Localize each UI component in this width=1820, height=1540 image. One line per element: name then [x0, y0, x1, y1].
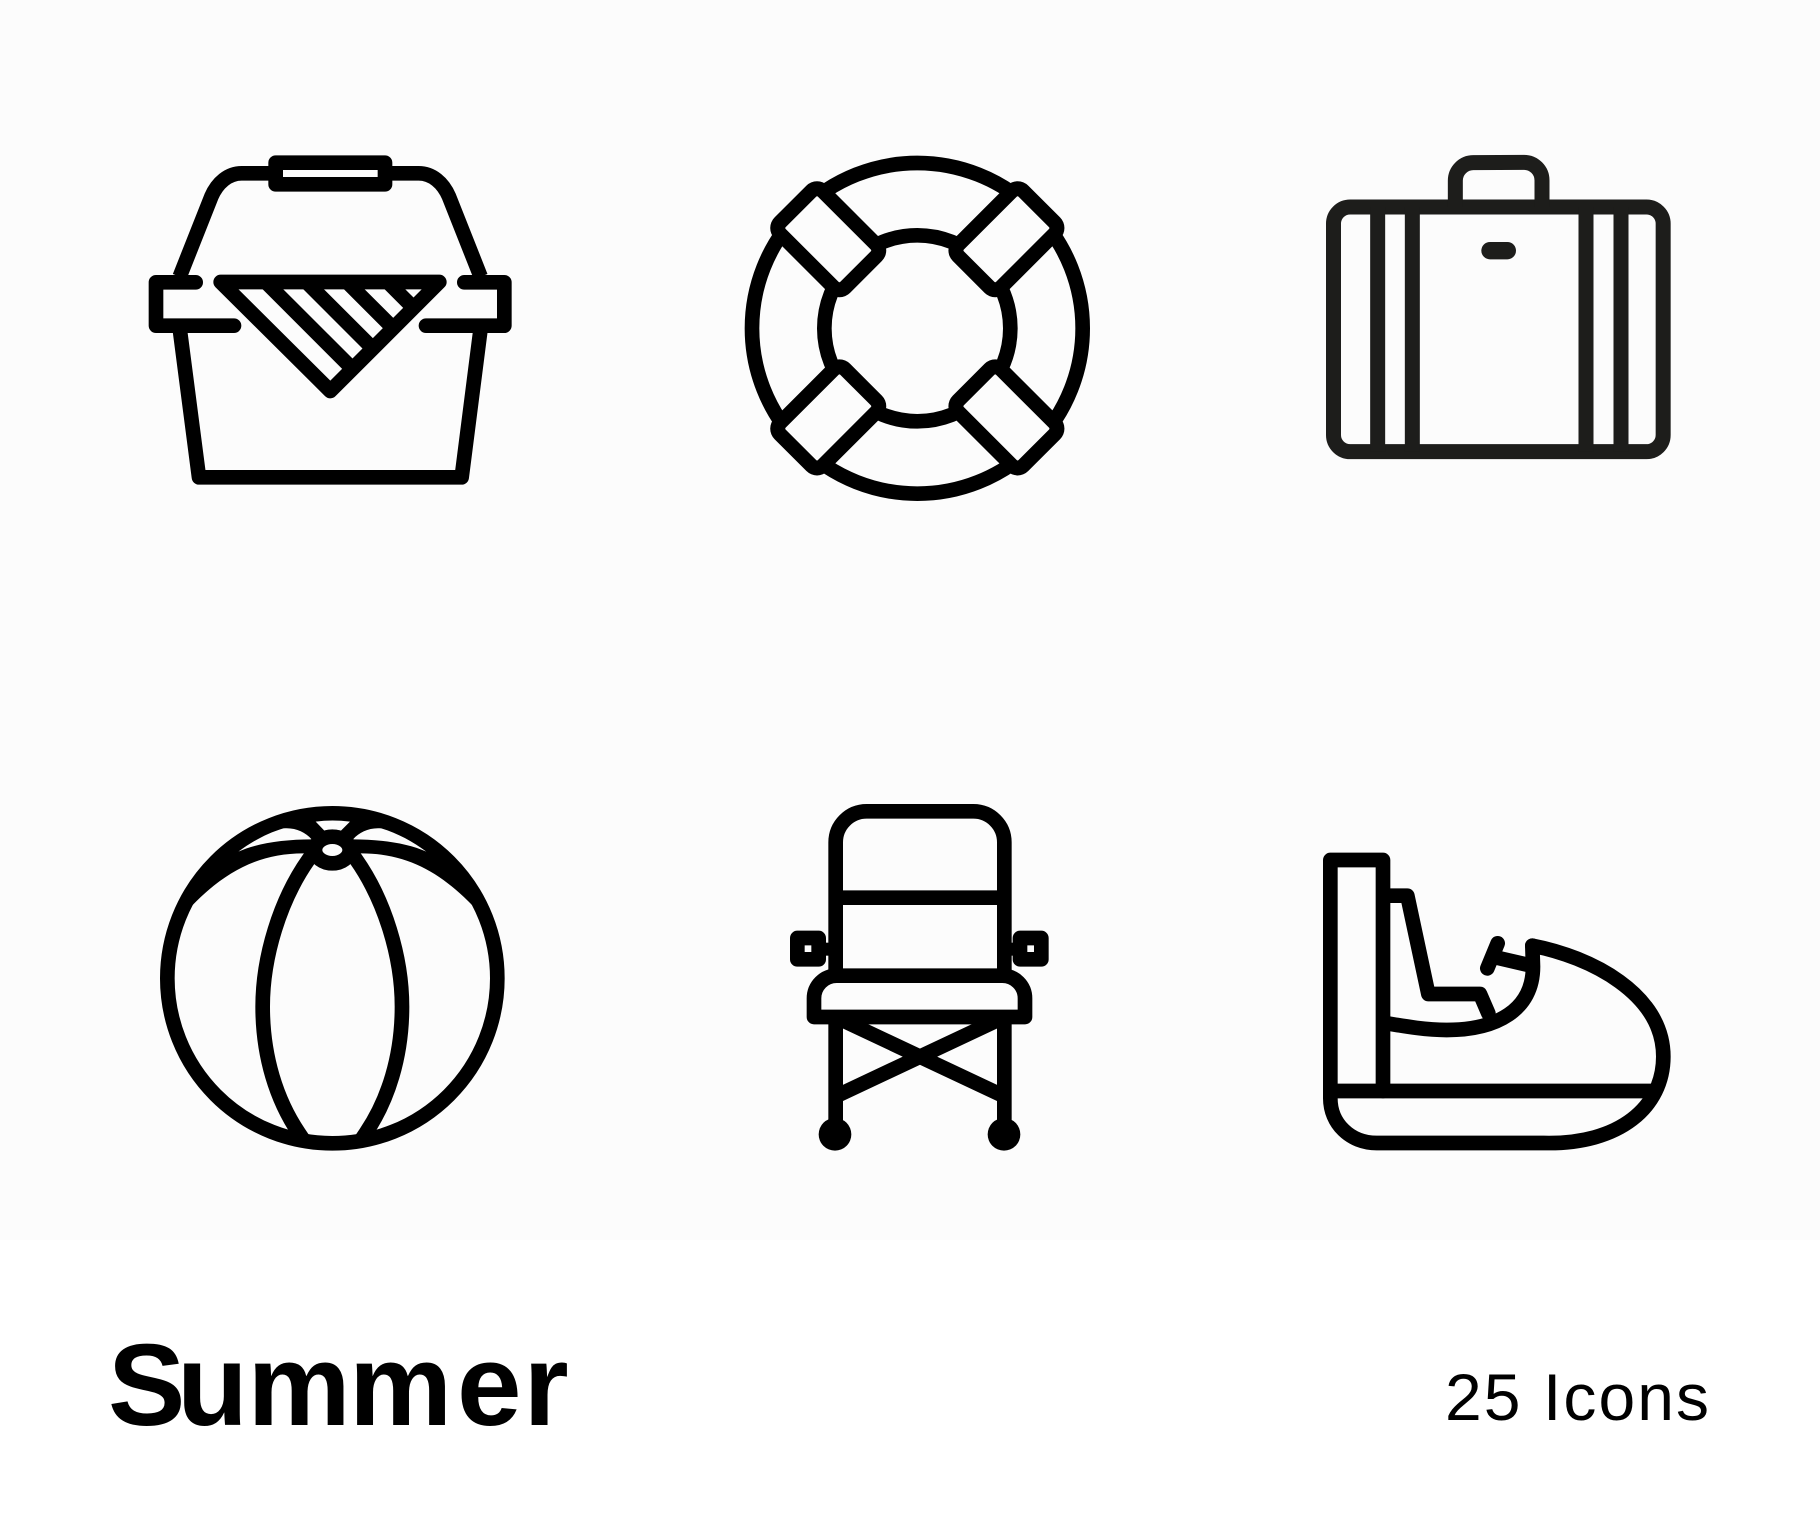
title: Summer	[108, 1320, 569, 1450]
icon count label: 25 Icons	[1445, 1360, 1709, 1434]
icon: folding chair	[797, 811, 1041, 1151]
icon: beach ball	[167, 813, 497, 1143]
icon: suitcase	[1333, 162, 1663, 452]
icon: bumper car	[1330, 860, 1663, 1143]
icon: lifebuoy ring	[752, 163, 1083, 494]
icon: cooler box with striped triangle	[156, 163, 504, 477]
